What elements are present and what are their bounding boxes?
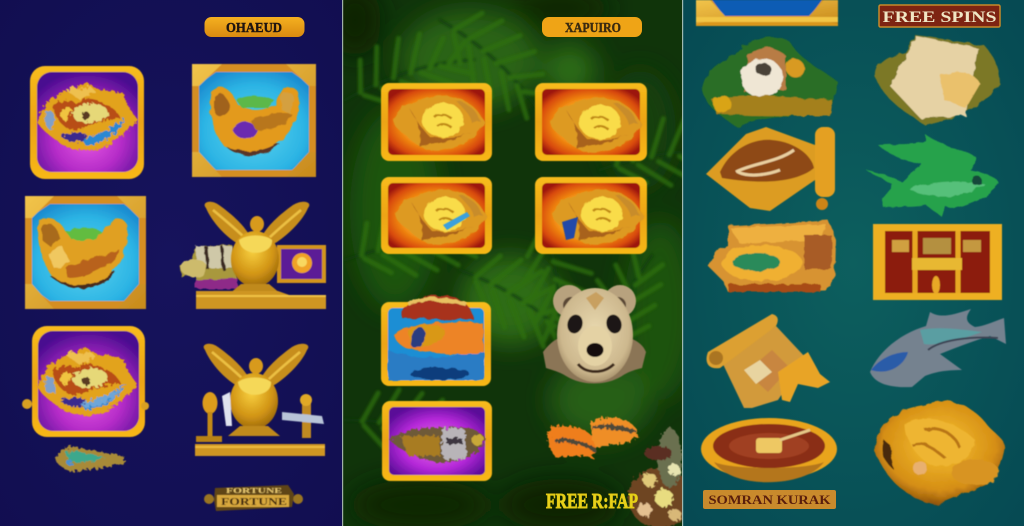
purple framed treasure tile, top [30,66,144,179]
panel: jungle asset sheet [343,0,682,526]
golden urn with columns [195,344,325,456]
small jewel ornament [55,446,124,472]
flower cluster, corner [626,426,682,526]
orange tile 1 [381,83,492,161]
free spins sign: FREE SPINS [882,9,997,26]
flaming orange ornaments [547,417,638,458]
orange tile 3 [381,177,492,254]
bottom label plaque: SOMRAN KURAK [708,492,831,507]
bottom ornate badge: FORTUNE [226,487,283,495]
scroll map [706,314,830,408]
grey fish [870,309,1006,387]
label pill: top navy: OHAEUD [226,21,282,36]
bowl diamond with scroll [706,127,835,211]
golden urn with side props [180,202,326,309]
blue tile with crown [381,296,491,386]
ornate gold plaque [708,220,836,292]
panel: navy asset sheet [0,0,342,526]
blue framed bowl tile, top right [192,64,316,177]
bottom ornate badge [204,485,303,511]
orange tile 4 [535,177,647,254]
green fish [866,134,999,217]
panel: teal asset sheet [683,0,1024,526]
bear head [543,285,646,384]
oval bowl [701,418,837,482]
label pill: top jungle: XAPUIRO [565,21,621,36]
panel separators [342,0,683,526]
bottom label plaque [703,490,836,509]
parchment note [876,35,1000,125]
blue framed bowl tile, left [25,196,146,309]
purple framed treasure tile, bottom [22,326,149,437]
label pill: top navy [204,17,304,37]
bottom ornate badge: FORTUNE [221,496,287,508]
purple tile [382,401,492,481]
gold nugget pile [875,401,1005,505]
orange tile 2 [535,83,647,161]
red and gold board [873,224,1002,300]
free spins sign [879,5,1000,27]
label pill: top jungle [542,17,642,37]
yellow bottom title: FREE R:FAP [546,489,638,513]
bear in foliage with sunflowers [702,38,838,128]
cropped blue tile, top [696,0,838,26]
